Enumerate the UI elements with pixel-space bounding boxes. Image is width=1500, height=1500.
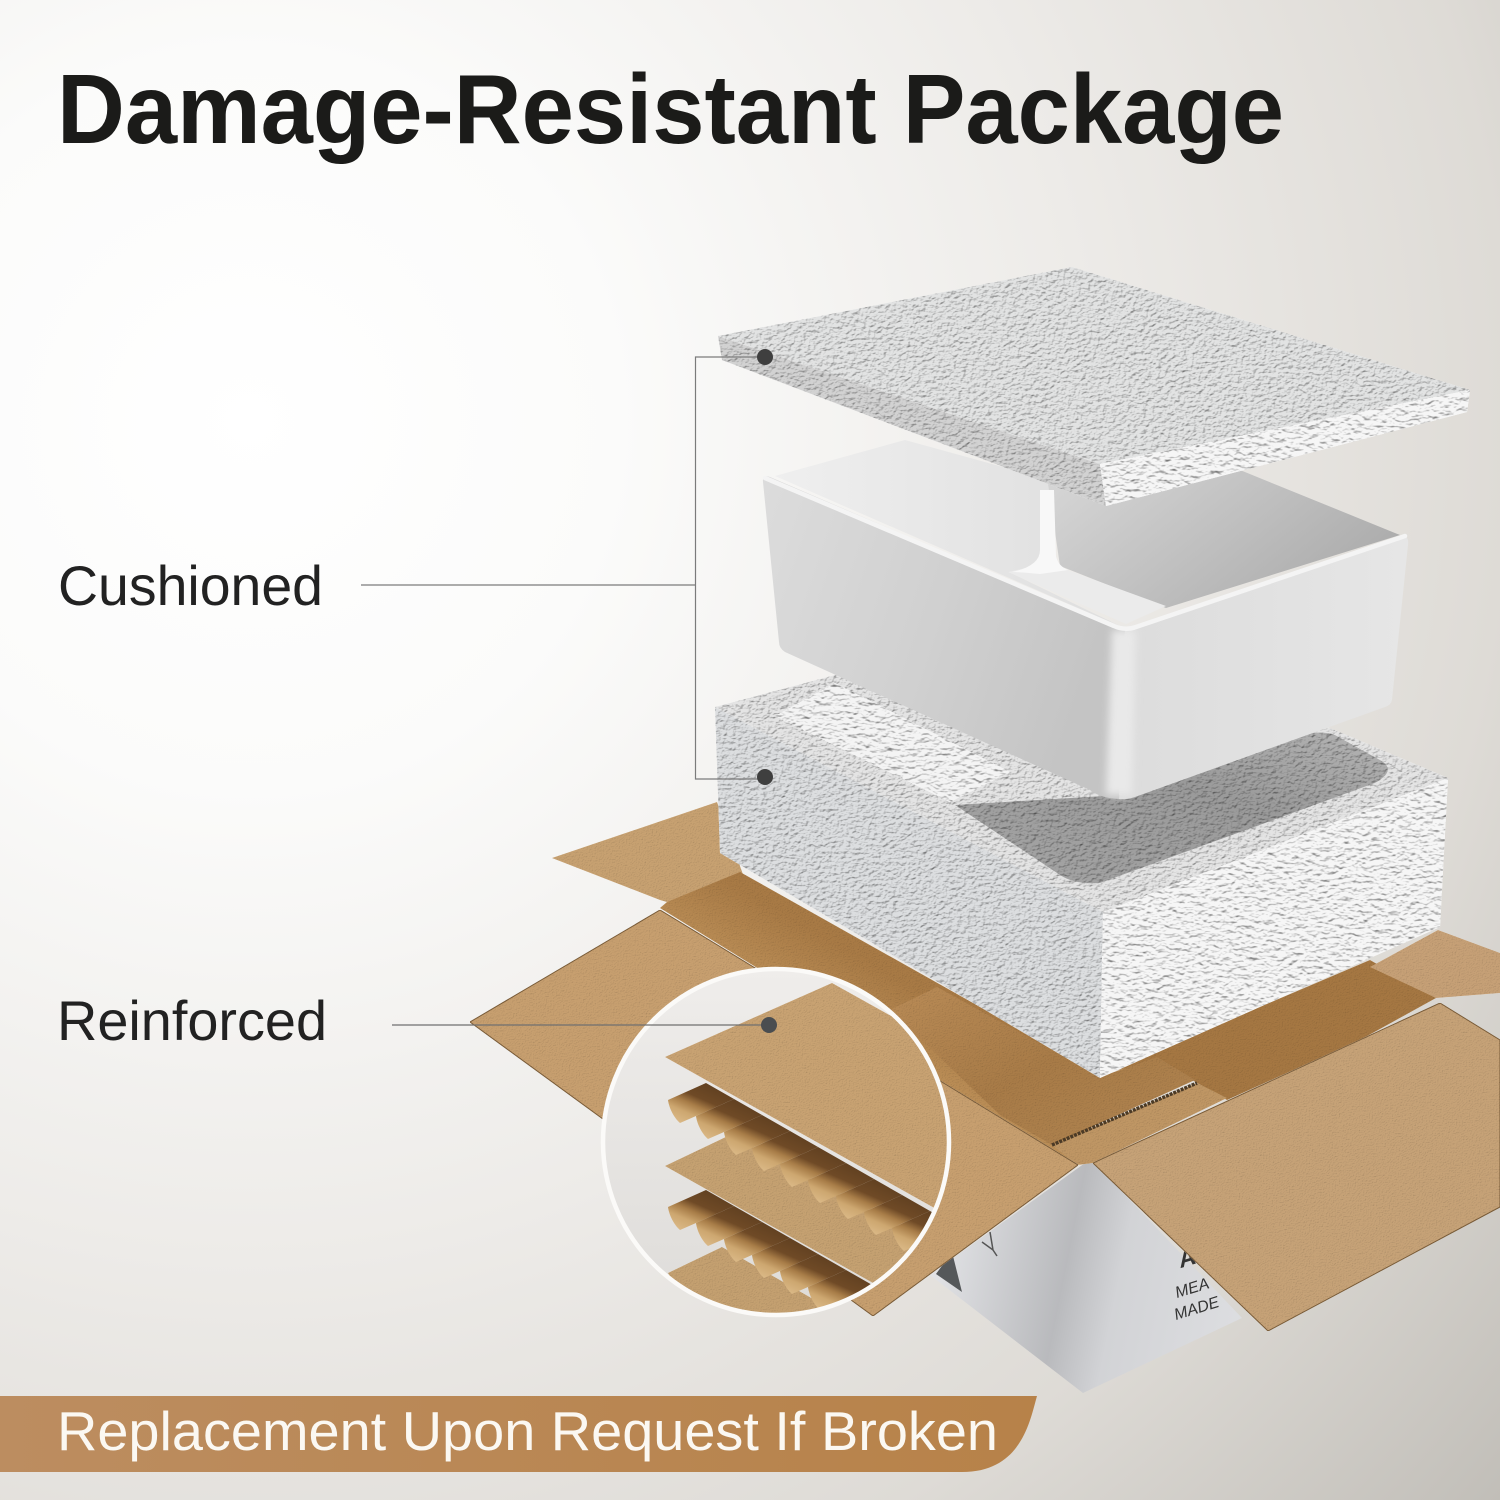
- basin floor: [1008, 563, 1166, 624]
- title: Damage-Resistant Package: [57, 54, 1284, 164]
- upper flute band: [668, 1083, 932, 1251]
- cushioned leader lines: [361, 357, 765, 779]
- illustration: exploded package: [470, 267, 1500, 1393]
- foam base top rim: [715, 675, 1448, 912]
- middle liner sheet: [665, 1137, 910, 1283]
- white ceramic basin: [763, 440, 1408, 799]
- corrugated layers clipped to circle: [665, 983, 947, 1313]
- foam base: [715, 675, 1448, 1078]
- white outer box side: MADE: [1172, 1294, 1222, 1324]
- reinforced leader line: [392, 1024, 769, 1026]
- corner highlight: [1012, 490, 1068, 574]
- callout: reinforced: [57, 989, 777, 1052]
- top liner sheet: [665, 983, 947, 1208]
- white outer box side: MEA: [1173, 1275, 1211, 1302]
- marker: cardboard: [761, 1017, 777, 1033]
- right front flap: [1093, 1003, 1500, 1331]
- foam ledge with raised beads: [775, 683, 1010, 802]
- basin right outer face: [1119, 536, 1408, 799]
- bottom liner sheet: [668, 1247, 818, 1313]
- cardboard front flaps: [470, 910, 1500, 1331]
- basin interior back wall: [1046, 470, 1400, 608]
- basin left outer face: [763, 476, 1125, 799]
- circle background: [604, 970, 948, 1314]
- lid left side: [718, 336, 1106, 506]
- foam lid: [718, 267, 1470, 506]
- lid top surface: [718, 267, 1470, 464]
- box interior walls: [552, 802, 1500, 1165]
- banner text: Replacement Upon Request If Broken: [57, 1400, 998, 1462]
- callout: cushioned: [58, 349, 773, 785]
- foam cavity: [955, 732, 1388, 883]
- basin rim highlight: [765, 478, 1405, 629]
- banner shape: [0, 1396, 1037, 1472]
- corrugated edge of inner flap: [1052, 1083, 1197, 1145]
- basin interior left wall: [775, 440, 1124, 628]
- zoom circle: corrugated cardboard layers: [601, 966, 952, 1318]
- foam base left face: [715, 707, 1103, 1078]
- marker: lid: [757, 349, 773, 365]
- white outer box side: A: [1174, 1243, 1199, 1274]
- left front flap: [470, 910, 1078, 1316]
- lower flute band: [668, 1190, 871, 1308]
- circle border: [603, 969, 949, 1315]
- lid right side: [1100, 390, 1470, 506]
- banner: replacement promise: [0, 1396, 1037, 1472]
- basin front corner soft highlight: [1106, 630, 1136, 795]
- marker: base: [757, 769, 773, 785]
- reinforced label: Reinforced: [57, 989, 327, 1052]
- cardboard box: side panel and interior: [552, 802, 1500, 1393]
- cushioned label: Cushioned: [58, 554, 323, 617]
- foam base right face: [1100, 778, 1448, 1078]
- white outer box side: [930, 1163, 1242, 1393]
